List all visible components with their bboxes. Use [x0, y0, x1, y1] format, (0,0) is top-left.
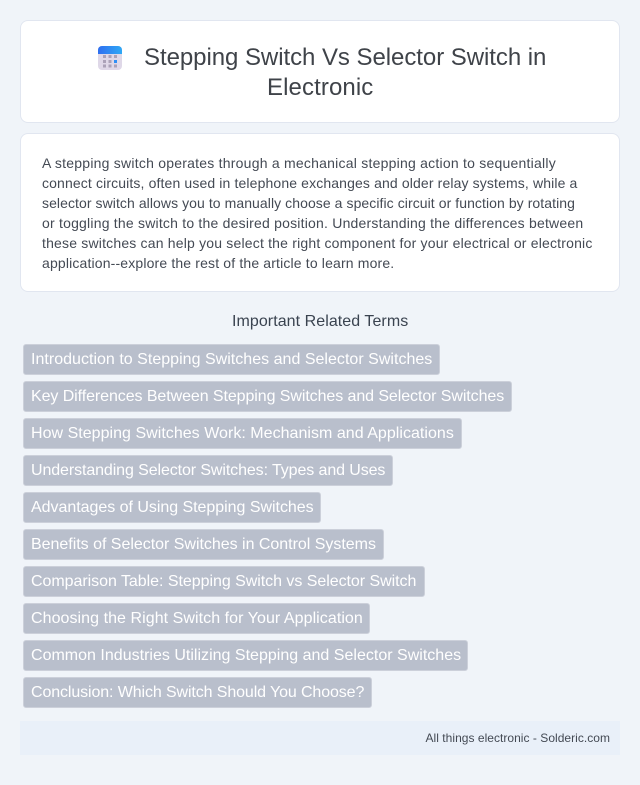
text block: intro: selector switch allows you to manually choose a specific circuit or function by rotating — [42, 195, 575, 211]
tag 3 — [23, 418, 462, 449]
panel: intro paragraph — [20, 133, 620, 292]
heading: Electronic — [267, 74, 373, 101]
tag 2: Key Differences Between Stepping Switches and Selector Switches — [31, 388, 504, 405]
footer text: All things electronic - Solderic.com — [426, 731, 610, 745]
tag 9 — [23, 640, 468, 671]
tag 10 — [23, 677, 372, 708]
tag 5 — [23, 492, 321, 523]
tag 9: Common Industries Utilizing Stepping and Selector Switches — [31, 647, 461, 664]
icon: calendar — [98, 46, 122, 70]
tag 8 — [23, 603, 370, 634]
panel: title card — [20, 20, 620, 123]
text block: intro: these switches can help you select the right component for your electrical or electronic — [42, 235, 593, 251]
tag 4: Understanding Selector Switches: Types and Uses — [31, 462, 385, 479]
footer — [20, 721, 620, 755]
heading — [144, 44, 546, 101]
tag 4 — [23, 455, 393, 486]
tag 1: Introduction to Stepping Switches and Selector Switches — [31, 351, 432, 368]
tag 3: How Stepping Switches Work: Mechanism and Applications — [31, 425, 454, 442]
heading: related terms: Important Related Terms — [232, 313, 408, 330]
tag 6: Benefits of Selector Switches in Control Systems — [31, 536, 376, 553]
text block: intro: application--explore the rest of the article to learn more. — [42, 255, 394, 271]
list: related terms — [23, 344, 512, 708]
tag 2 — [23, 381, 512, 412]
tag 1 — [23, 344, 440, 375]
heading: Stepping Switch Vs Selector Switch in — [144, 44, 546, 71]
tag 10: Conclusion: Which Switch Should You Choose? — [31, 684, 364, 701]
text block: intro: A stepping switch operates through a mechanical stepping action to sequentially — [42, 155, 556, 171]
tag 8: Choosing the Right Switch for Your Application — [31, 610, 363, 627]
tag 7: Comparison Table: Stepping Switch vs Selector Switch — [31, 573, 416, 590]
text block: intro: or toggling the switch to the desired position. Understanding the differences between — [42, 215, 583, 231]
text block: intro: connect circuits, often used in telephone exchanges and older relay systems, while a — [42, 175, 577, 191]
tag 5: Advantages of Using Stepping Switches — [31, 499, 314, 516]
text block: intro — [42, 155, 593, 271]
tag 7 — [23, 566, 425, 597]
tag 6 — [23, 529, 384, 560]
